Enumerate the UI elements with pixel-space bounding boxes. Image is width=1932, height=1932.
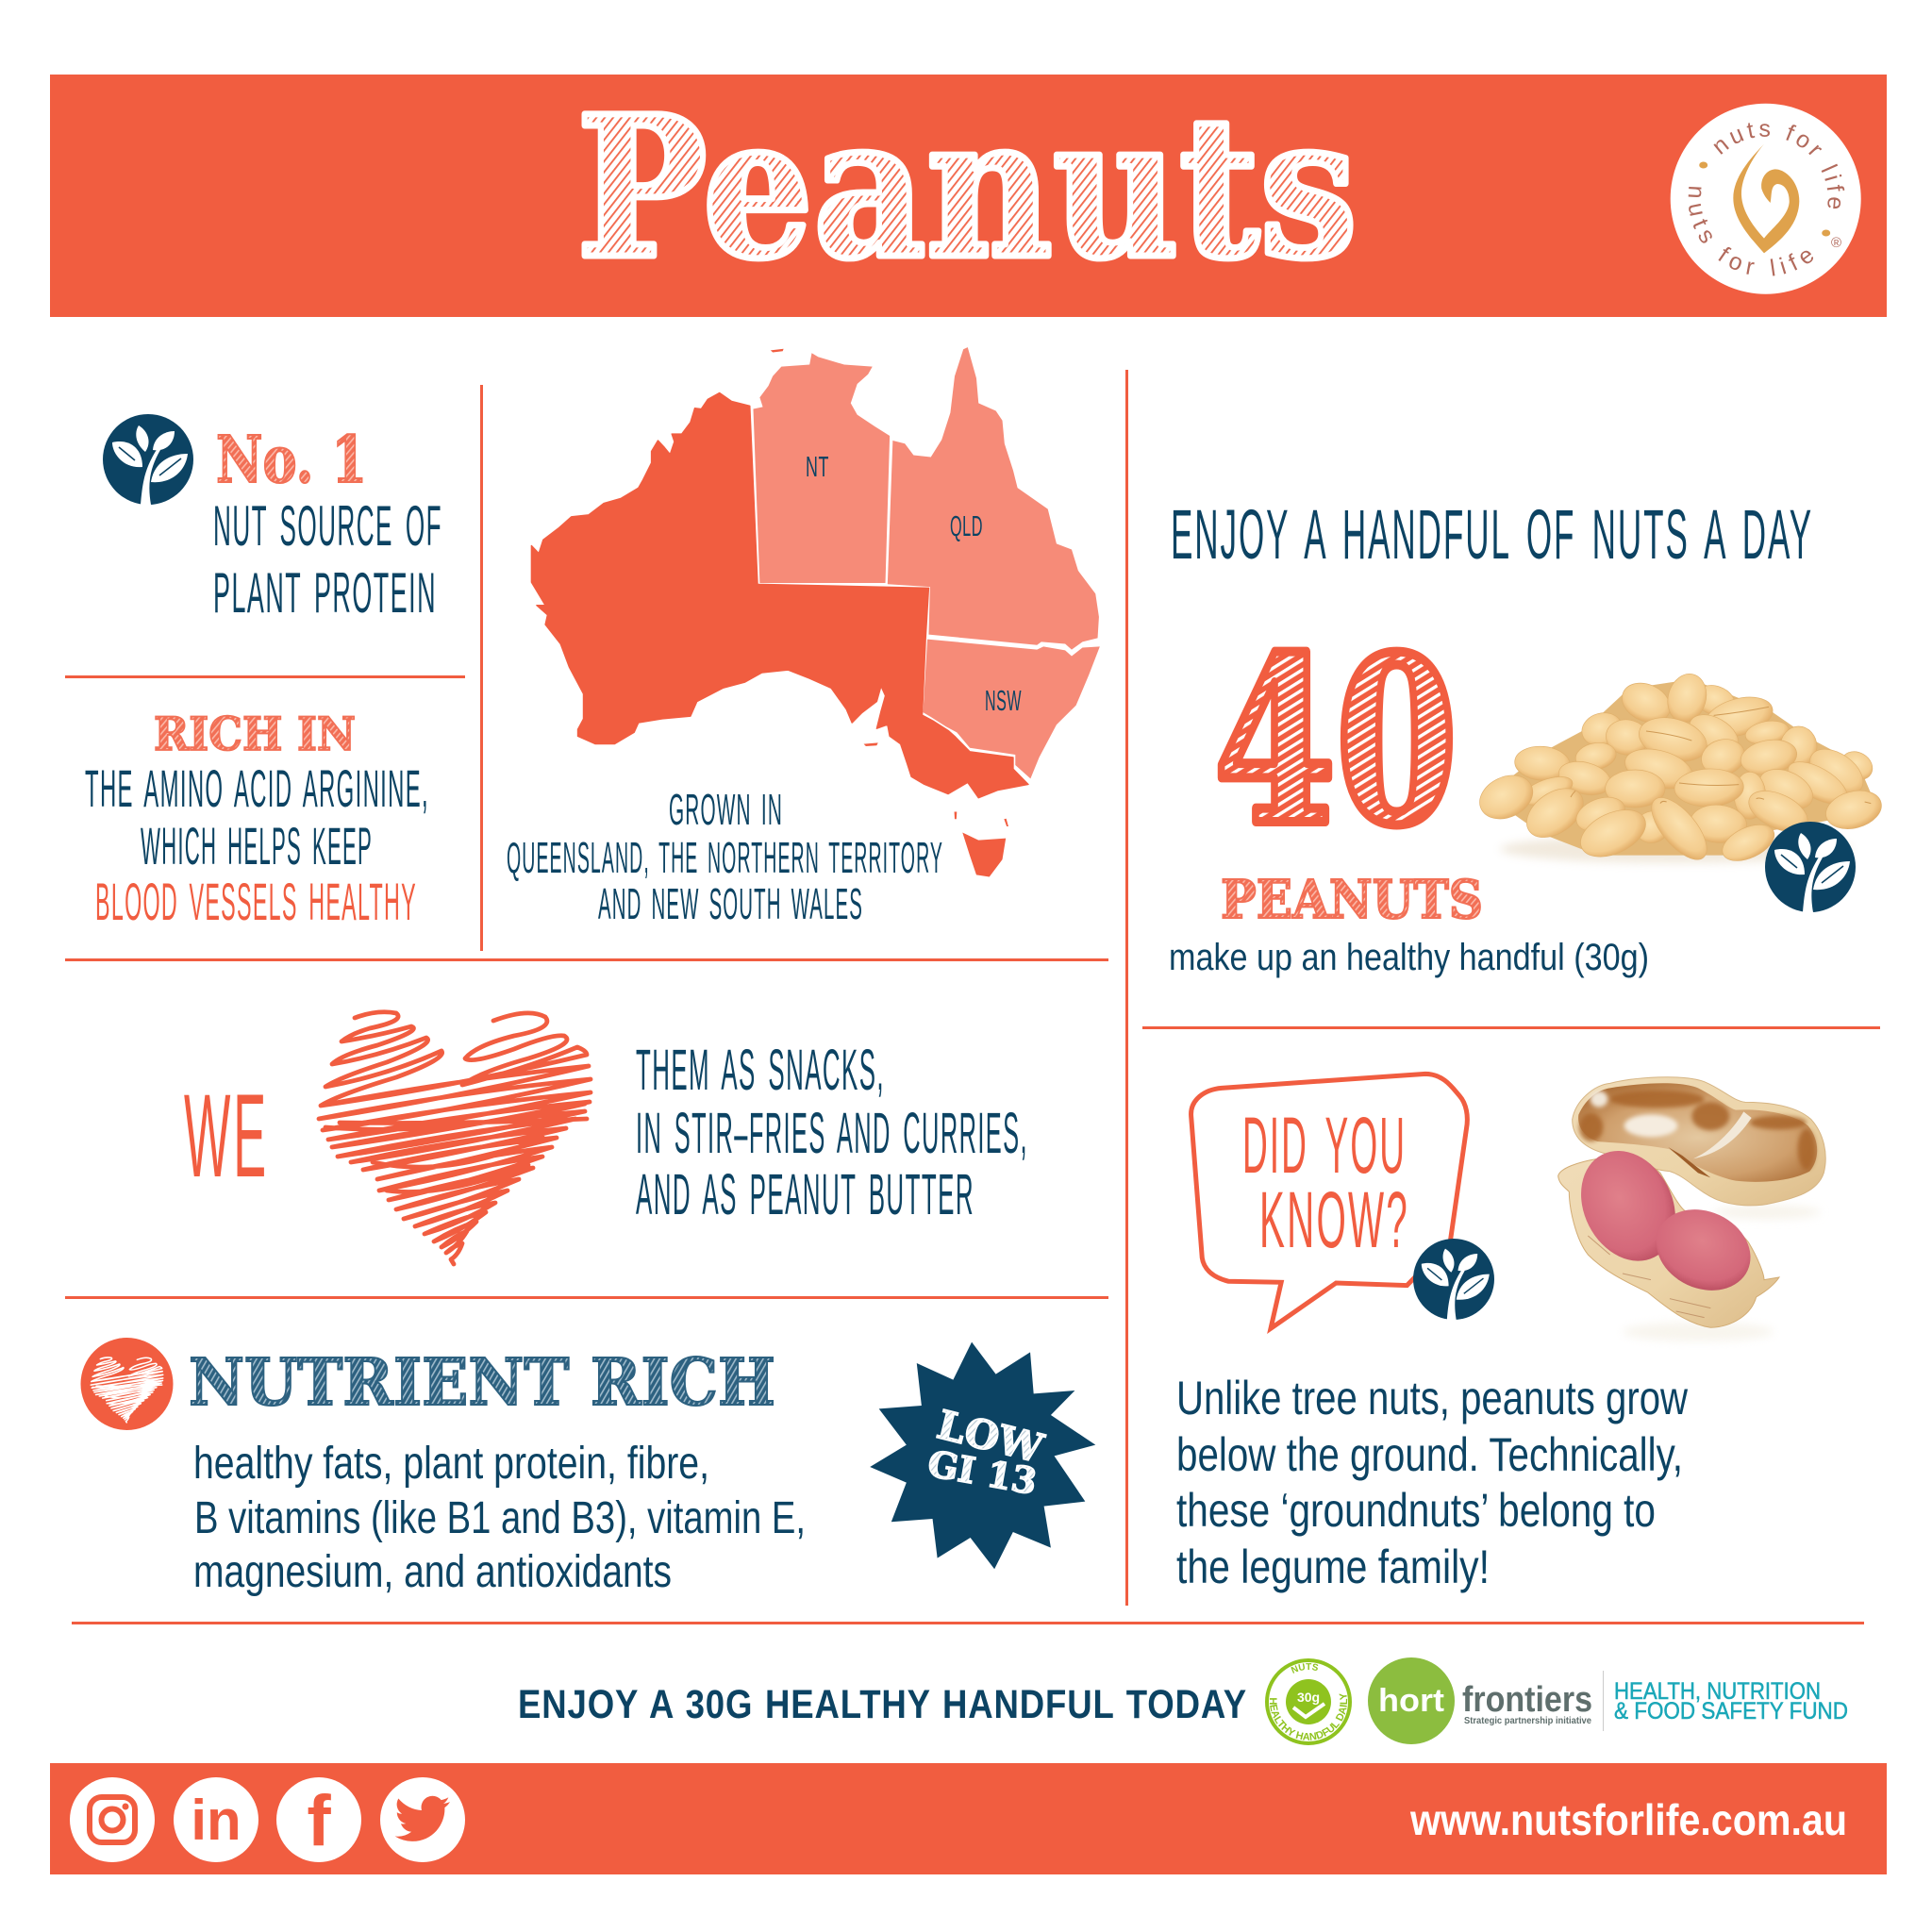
heading: rich in: RICH IN [154,707,356,761]
icon: facebook: f [307,1781,331,1861]
panel: 40 peanuts [1169,608,1886,978]
heading: No. 1: No. 1 [216,423,367,498]
text: grown in: AND NEW SOUTH WALES [598,879,863,928]
logo: health fund: & FOOD SAFETY FUND [1614,1698,1848,1724]
text: groundnuts: Unlike tree nuts, peanuts grow [1176,1372,1689,1424]
logo: 30g badge: HEALTHY HANDFUL DAILY [1270,1693,1347,1740]
logo: 30g badge: NUTS [1291,1663,1319,1674]
title: Peanuts [576,74,1357,302]
panel: rich in arginine [85,707,429,931]
text: BLOOD VESSELS HEALTHY [95,872,417,931]
logo: nuts for life: ® [1831,235,1841,251]
logo: hort frontiers: Strategic partnership initiative [1464,1716,1591,1726]
text: NUT SOURCE OF [213,494,442,558]
image: peanut shell [1558,1077,1825,1341]
panel: did you know: DID YOU [1242,1101,1407,1190]
badge: low GI: GI 13 [924,1441,1041,1503]
badge: low GI [870,1342,1095,1569]
panel: did you know: KNOW? [1259,1175,1409,1264]
text: groundnuts: these ‘groundnuts’ belong to [1176,1484,1656,1537]
text: nut source [213,494,442,625]
logo: nuts for life: nuts for life [1689,187,1813,275]
text: AND AS PEANUT BUTTER [636,1162,974,1226]
text: groundnuts: the legume family! [1176,1541,1490,1593]
text: arginine [85,758,429,931]
tagline: ENJOY A 30G HEALTHY HANDFUL TODAY [518,1682,1247,1727]
text: groundnuts: below the ground. Technically, [1176,1428,1683,1481]
panel: we love: WE [184,1071,269,1202]
map region: QLD [888,347,1099,650]
header banner [50,74,1887,317]
map region: Tasmania [962,832,1006,876]
panel: nutrient rich [81,1338,1095,1597]
icon: leaf [1765,822,1856,912]
dividers [65,370,1880,1624]
map region: NSW [923,640,1100,778]
map region: WA SA VIC [531,392,1028,798]
logo: health fund: HEALTH, NUTRITION [1614,1678,1821,1705]
panel: did you know [1176,1074,1825,1593]
icon: instagram [70,1777,155,1862]
logo: hort frontiers: frontiers [1462,1680,1592,1720]
heading: nutrient rich: NUTRIENT RICH [189,1345,775,1421]
badge: low GI: LOW [933,1401,1048,1473]
logo: hort frontiers [1368,1657,1604,1744]
number: 40: 40 [1214,608,1457,876]
map labels: QLD [950,509,983,542]
text: grown in: GROWN IN [669,785,783,834]
text: IN STIR–FRIES AND CURRIES, [636,1101,1028,1165]
text: QUEENSLAND, THE NORTHERN TERRITORY [507,833,943,882]
map labels: NT [806,450,829,483]
text: website: www.nutsforlife.com.au [1409,1795,1847,1844]
text: THE AMINO ACID ARGININE, [85,758,429,818]
text: PLANT PROTEIN [213,561,437,625]
text: snacks: THEM AS SNACKS, [636,1038,885,1102]
text: nutrients: B vitamins (like B1 and B3), vitamin E, [194,1493,806,1543]
text: groundnuts [1176,1372,1689,1593]
text: nutrients: healthy fats, plant protein, fibre, [193,1439,709,1489]
icon: linkedin: in [191,1789,242,1852]
logo: 30g badge: 30g [1297,1690,1320,1705]
icon: heart circle [81,1338,174,1430]
map region: NT [753,353,890,583]
icon: linkedin [174,1777,258,1862]
speech bubble [1191,1074,1467,1328]
map: Australia [531,347,1100,876]
panel: No. 1 plant protein [103,414,442,625]
panel: we love [184,1012,1028,1264]
icon: scribble heart [319,1012,591,1264]
logo: nuts for life [1670,104,1861,294]
text: handful: make up an healthy handful (30g) [1169,937,1649,978]
footer banner [50,1763,1887,1874]
logo: 30g badge [1265,1658,1352,1745]
map labels [806,450,1022,717]
text: grown in [507,785,943,928]
icon: leaf [103,414,193,505]
text: snacks [636,1038,1028,1226]
text: WHICH HELPS KEEP [141,816,373,875]
text: nutrients [193,1439,806,1597]
map labels: NSW [985,684,1022,717]
icon: facebook [276,1777,361,1862]
text: nutrients: magnesium, and antioxidants [193,1547,672,1597]
icon: twitter [380,1777,465,1862]
heading: peanuts: PEANUTS [1221,869,1483,931]
icon: leaf [1413,1239,1494,1320]
logo: health fund [1614,1678,1848,1724]
text: did you know [1242,1101,1409,1264]
map region: islands [771,349,1008,826]
logo: hort frontiers: hort [1378,1683,1444,1719]
logo: nuts for life: nuts for life [1713,123,1845,209]
image: peanut pile [1473,670,1886,869]
